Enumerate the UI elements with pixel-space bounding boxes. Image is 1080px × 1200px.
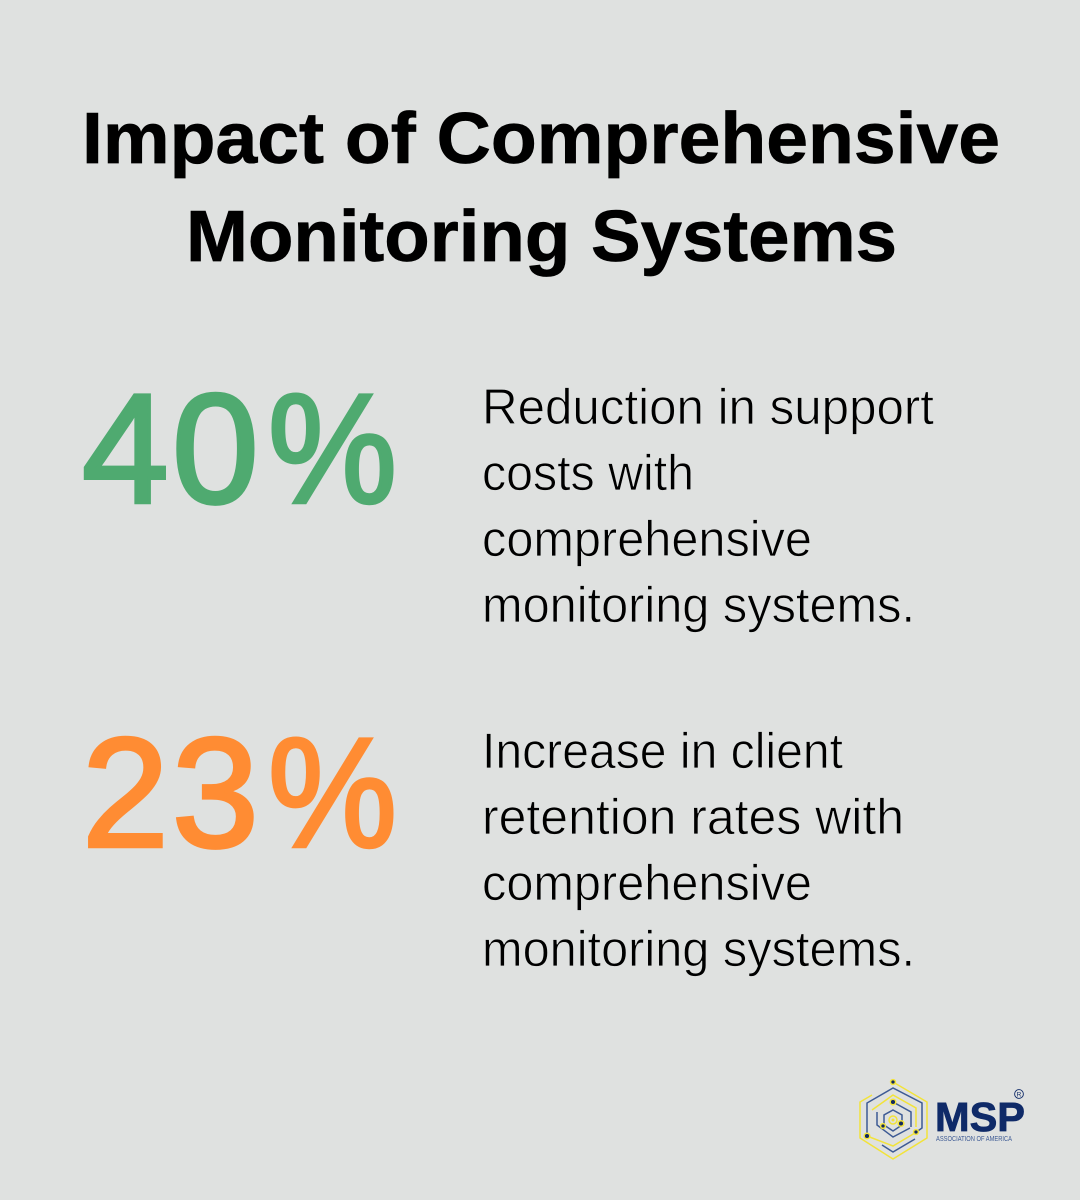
stat description: support costs: monitoring systems.	[482, 577, 915, 633]
stat description: client retention: retention rates with	[482, 789, 904, 845]
stat description: client retention: monitoring systems.	[482, 921, 915, 977]
registered mark	[1015, 1090, 1023, 1098]
stat value: 40%: %	[268, 362, 397, 536]
stat description: client retention	[482, 723, 915, 977]
logo tagline: ASSOCIATION OF AMERICA	[936, 1136, 1012, 1143]
stat value: 23%	[82, 706, 397, 880]
stat description: support costs: Reduction in support	[482, 379, 934, 435]
registered mark: R	[1017, 1092, 1022, 1098]
title	[82, 99, 1000, 277]
title: Monitoring Systems	[186, 197, 897, 277]
stat description: support costs: costs with	[482, 445, 694, 501]
icon: hexagon circuit mark	[860, 1080, 927, 1159]
stat: 40%	[82, 362, 934, 633]
stat value: 40%: 40	[82, 362, 259, 536]
stat description: support costs: comprehensive	[482, 511, 812, 567]
stat value: 40%	[82, 362, 397, 536]
stat: 23%	[82, 706, 915, 977]
title: Impact of Comprehensive	[82, 99, 1000, 179]
stat description: support costs	[482, 379, 934, 633]
logo wordmark: MSP	[935, 1094, 1025, 1140]
stat description: client retention: Increase in client	[482, 723, 843, 779]
logo: MSP Association of America	[860, 1080, 1025, 1159]
stat description: client retention: comprehensive	[482, 855, 812, 911]
stat value: 23%: 23	[82, 706, 259, 880]
stat value: 23%: %	[268, 706, 397, 880]
